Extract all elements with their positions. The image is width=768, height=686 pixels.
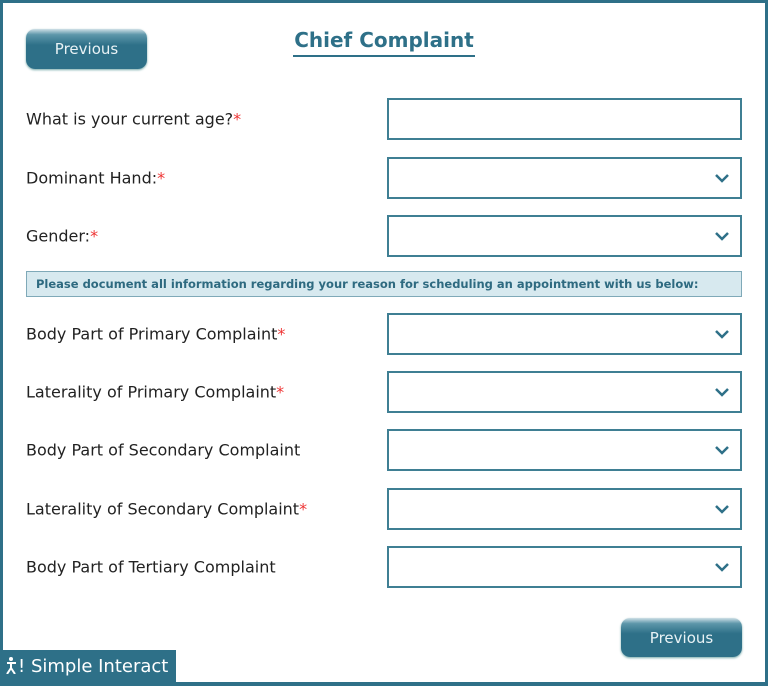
label: body part primary: Body Part of Primary Complaint* bbox=[26, 324, 285, 344]
button: previous bottom bbox=[621, 618, 742, 657]
field: laterality primary bbox=[387, 371, 742, 413]
footer badge: ! Simple Interact bbox=[18, 656, 168, 677]
button: previous top bbox=[26, 29, 147, 69]
field: body part tertiary bbox=[387, 546, 742, 588]
label: laterality secondary: Laterality of Secondary Complaint* bbox=[26, 500, 307, 518]
field: body part primary bbox=[387, 313, 742, 355]
label: body part secondary: Body Part of Secondary Complaint bbox=[26, 440, 300, 460]
title: Chief Complaint bbox=[294, 28, 474, 52]
field: laterality secondary bbox=[387, 488, 742, 530]
label: laterality primary: Laterality of Primary Complaint* bbox=[26, 382, 284, 402]
info bar: Please document all information regarding your reason for scheduling an appointment with us below: bbox=[36, 277, 698, 291]
field: age bbox=[387, 98, 742, 140]
button: previous bottom: Previous bbox=[650, 628, 713, 646]
label: gender: Gender:* bbox=[26, 226, 98, 246]
footer badge bbox=[0, 650, 176, 686]
button: previous top: Previous bbox=[55, 40, 118, 58]
label: age: What is your current age?* bbox=[26, 110, 241, 128]
field: body part secondary bbox=[387, 429, 742, 471]
label: hand: Dominant Hand:* bbox=[26, 168, 165, 188]
info bar bbox=[26, 271, 742, 297]
label: body part tertiary: Body Part of Tertiary Complaint bbox=[26, 558, 276, 576]
field: hand bbox=[387, 157, 742, 199]
field: gender bbox=[387, 215, 742, 257]
